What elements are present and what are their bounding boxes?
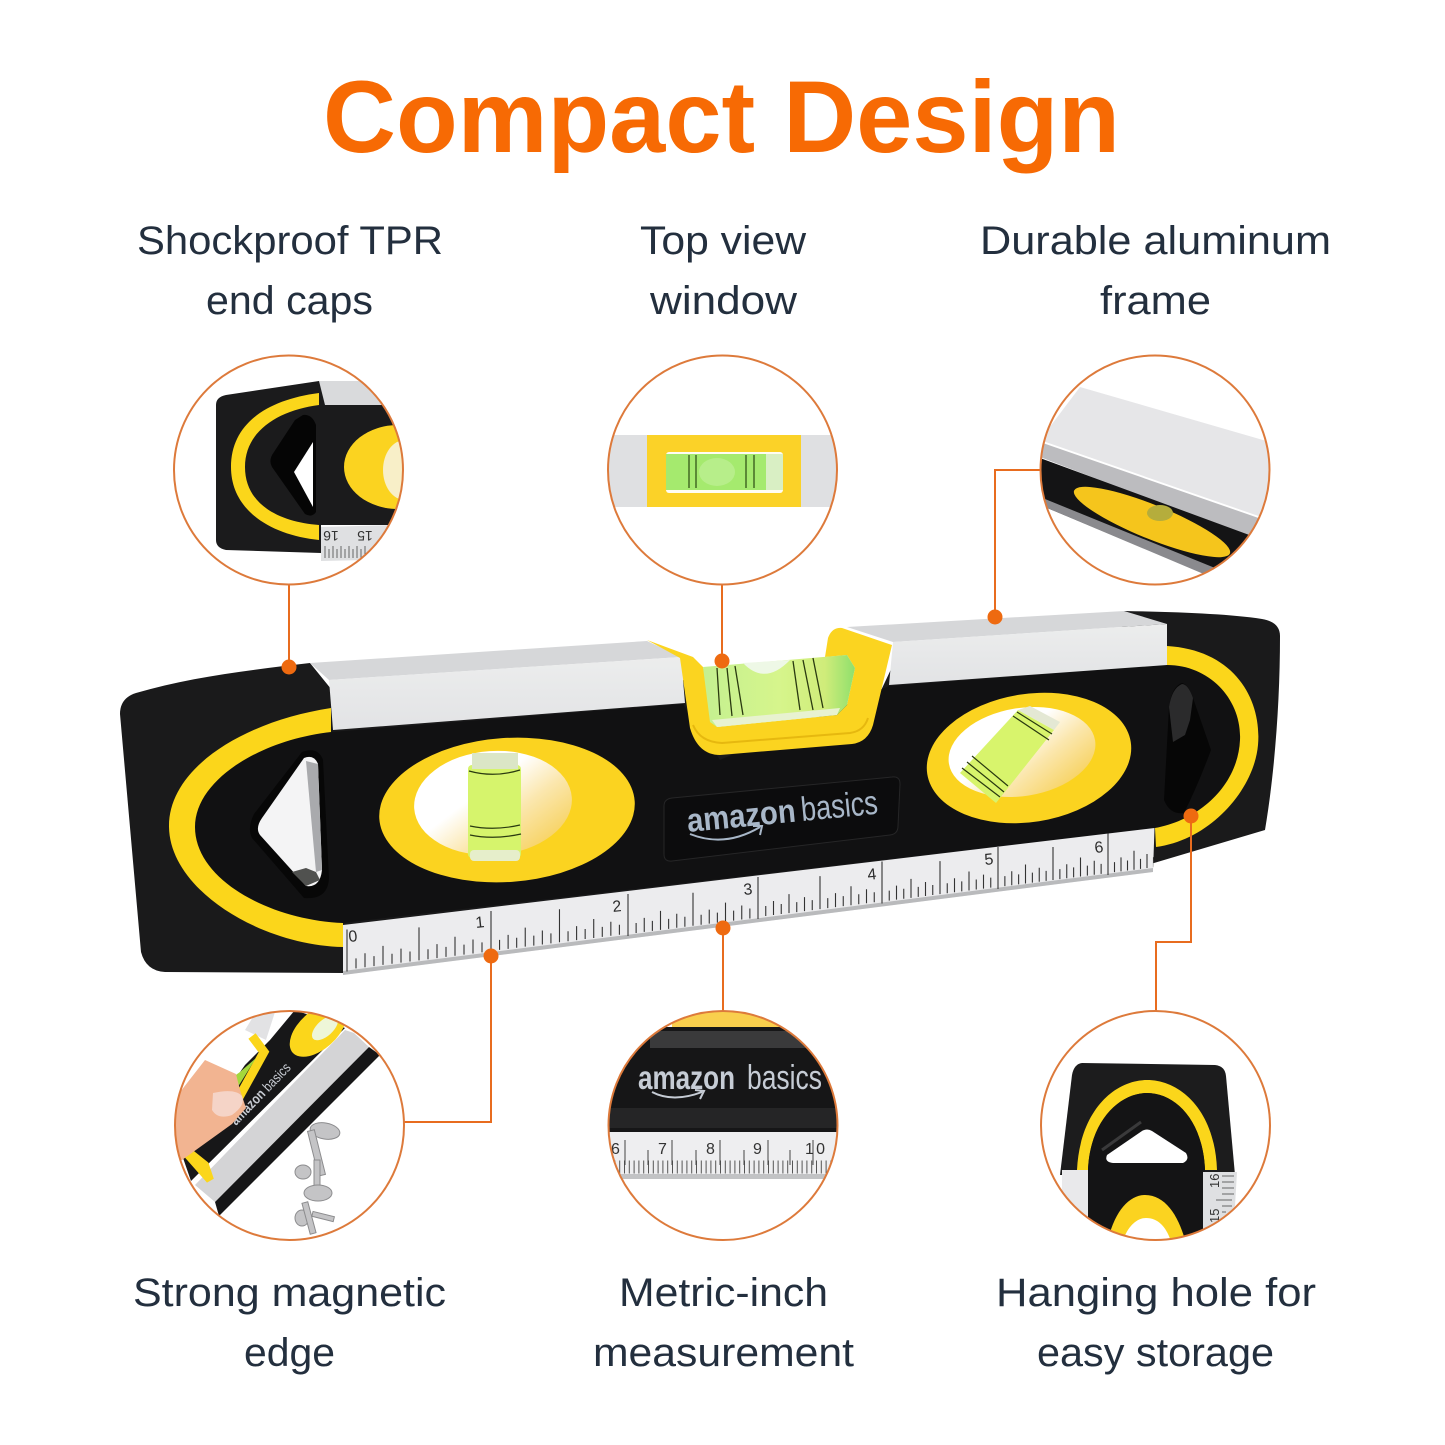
label: hanging hole for easy storage: Hanging hole for xyxy=(996,1271,1316,1315)
circle: metric-inch detail: 10 xyxy=(805,1141,825,1158)
circle: hanging hole detail xyxy=(1041,1011,1270,1245)
sub: level at an angle xyxy=(183,1012,379,1216)
right yellow end-cap arc xyxy=(1155,646,1258,847)
circle: metric-inch detail: 9 xyxy=(753,1141,762,1158)
ruler: 3 xyxy=(743,881,753,899)
sub: screws hanging from the magnetic edge xyxy=(295,1121,341,1234)
label: shockproof TPR end caps: end caps xyxy=(206,279,373,323)
connector: magnetic edge xyxy=(404,948,498,1122)
amazon basics badge: amazon xyxy=(685,792,797,839)
circle: metric-inch detail: 7 xyxy=(658,1141,667,1158)
label: shockproof TPR end caps: Shockproof TPR xyxy=(137,219,443,263)
circle: aluminum frame detail xyxy=(1040,356,1270,584)
label: hanging hole for easy storage: easy storage xyxy=(1037,1331,1274,1375)
label: durable aluminum frame xyxy=(980,219,1331,323)
circle: hanging hole detail: 16 xyxy=(1207,1174,1222,1188)
left aluminum frame xyxy=(310,641,685,730)
circle: metric-inch detail: 6 xyxy=(611,1141,620,1158)
connector: aluminum frame xyxy=(988,470,1042,624)
label: durable aluminum frame: Durable aluminum xyxy=(980,219,1331,263)
label: shockproof TPR end caps xyxy=(137,219,443,323)
circle: metric-inch detail: basics xyxy=(747,1059,822,1097)
torpedo level product xyxy=(120,611,1280,975)
center top-view window xyxy=(647,628,892,755)
circle: metric-inch detail: amazon xyxy=(638,1059,735,1096)
left oval window with vertical vial xyxy=(374,729,640,891)
connector: end caps xyxy=(282,585,296,674)
right oval window with tilted vial xyxy=(917,679,1141,837)
circle: metric-inch detail xyxy=(600,1011,845,1240)
circle: end cap detail: 15 xyxy=(357,528,373,544)
circle: magnetic edge detail xyxy=(170,993,404,1240)
label: strong magnetic edge: Strong magnetic xyxy=(133,1271,446,1315)
title: Compact Design xyxy=(323,60,1120,174)
label: durable aluminum frame: frame xyxy=(1100,279,1211,323)
left hanging hole xyxy=(250,750,329,898)
right aluminum frame xyxy=(847,611,1167,685)
level body xyxy=(120,611,1280,973)
circle: hanging hole detail: 15 xyxy=(1207,1209,1222,1223)
ruler: 6 xyxy=(1094,839,1104,857)
label: metric-inch measurement: Metric-inch xyxy=(619,1271,828,1315)
ruler: 5 xyxy=(984,851,994,869)
amazon basics badge xyxy=(664,777,900,861)
label: strong magnetic edge xyxy=(133,1271,446,1375)
connector: hanging hole xyxy=(1156,808,1198,1011)
label: top view window: window xyxy=(649,279,797,323)
left yellow end-cap arc xyxy=(169,708,343,947)
ruler: 1 xyxy=(475,914,485,932)
ruler xyxy=(343,828,1154,975)
circle: end cap detail xyxy=(173,354,404,586)
amazon basics badge: basics xyxy=(799,784,879,829)
circle: end cap detail: 16 xyxy=(323,528,339,544)
ruler: 2 xyxy=(612,898,622,916)
label: strong magnetic edge: edge xyxy=(244,1331,335,1375)
circle: metric-inch detail: 8 xyxy=(706,1141,715,1158)
connector: top view window xyxy=(714,585,730,668)
label: metric-inch measurement: measurement xyxy=(593,1331,854,1375)
ruler: 4 xyxy=(867,866,877,884)
label: metric-inch measurement xyxy=(593,1271,854,1375)
sub: hand holding the level xyxy=(170,1060,246,1160)
label: hanging hole for easy storage xyxy=(996,1271,1316,1375)
sub: level at an angle: amazon basics xyxy=(227,1059,294,1128)
ruler: 0 xyxy=(348,928,358,946)
connector: metric-inch xyxy=(716,920,730,1011)
right hanging hole xyxy=(1164,683,1211,813)
label: top view window xyxy=(640,219,806,323)
label: top view window: Top view xyxy=(640,219,806,263)
textured face panel xyxy=(195,665,1240,923)
circle: top view window detail xyxy=(600,356,850,584)
